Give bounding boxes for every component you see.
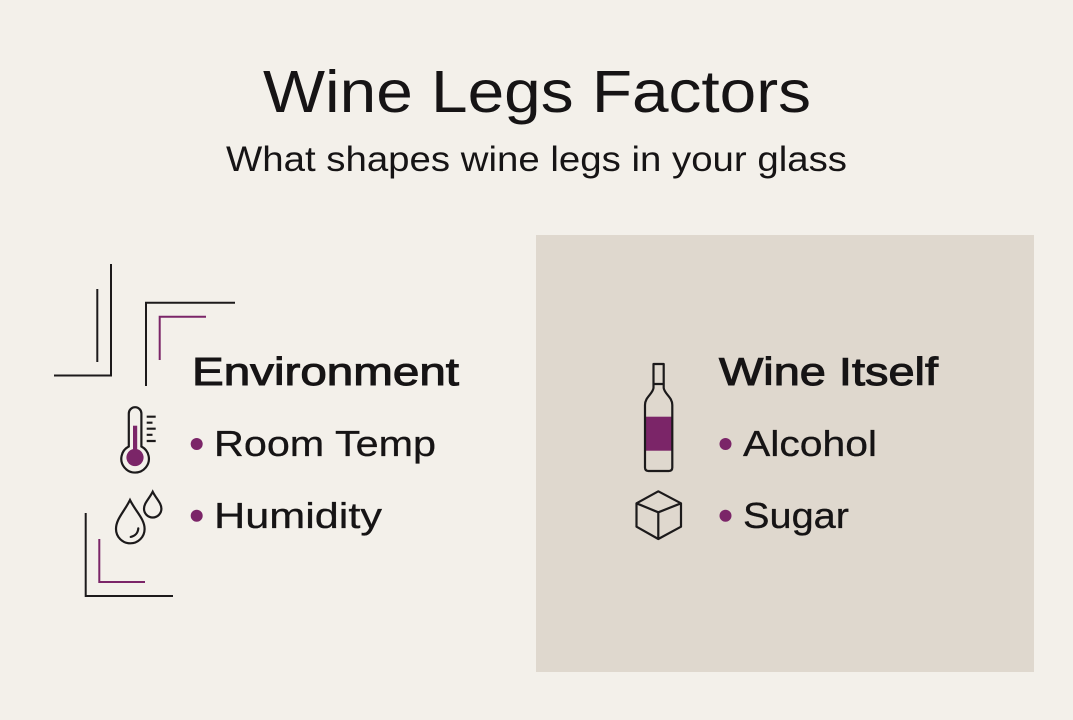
label: sugar: Sugar (743, 495, 849, 536)
title: Wine Legs Factors (263, 59, 811, 125)
label: room temp: Room Temp (214, 423, 436, 464)
decorative corner brackets: environment (54, 264, 235, 596)
bullet: room temp (191, 438, 203, 450)
icon: water drops (116, 492, 161, 543)
icon: wine bottle (645, 364, 672, 471)
panel: wine itself background (536, 235, 1034, 672)
bullet: humidity (191, 510, 203, 522)
icon: thermometer (121, 407, 156, 473)
heading: wine itself: Wine Itself (719, 351, 938, 394)
panel: environment content (116, 351, 459, 543)
icon: sugar cube (636, 491, 681, 539)
label: alcohol: Alcohol (743, 423, 877, 464)
panel: wine itself content (636, 351, 938, 539)
bullet: alcohol (720, 438, 732, 450)
bullet: sugar (720, 510, 732, 522)
heading: environment: Environment (192, 351, 459, 394)
label: humidity: Humidity (214, 495, 382, 536)
subtitle: What shapes wine legs in your glass (226, 140, 847, 179)
